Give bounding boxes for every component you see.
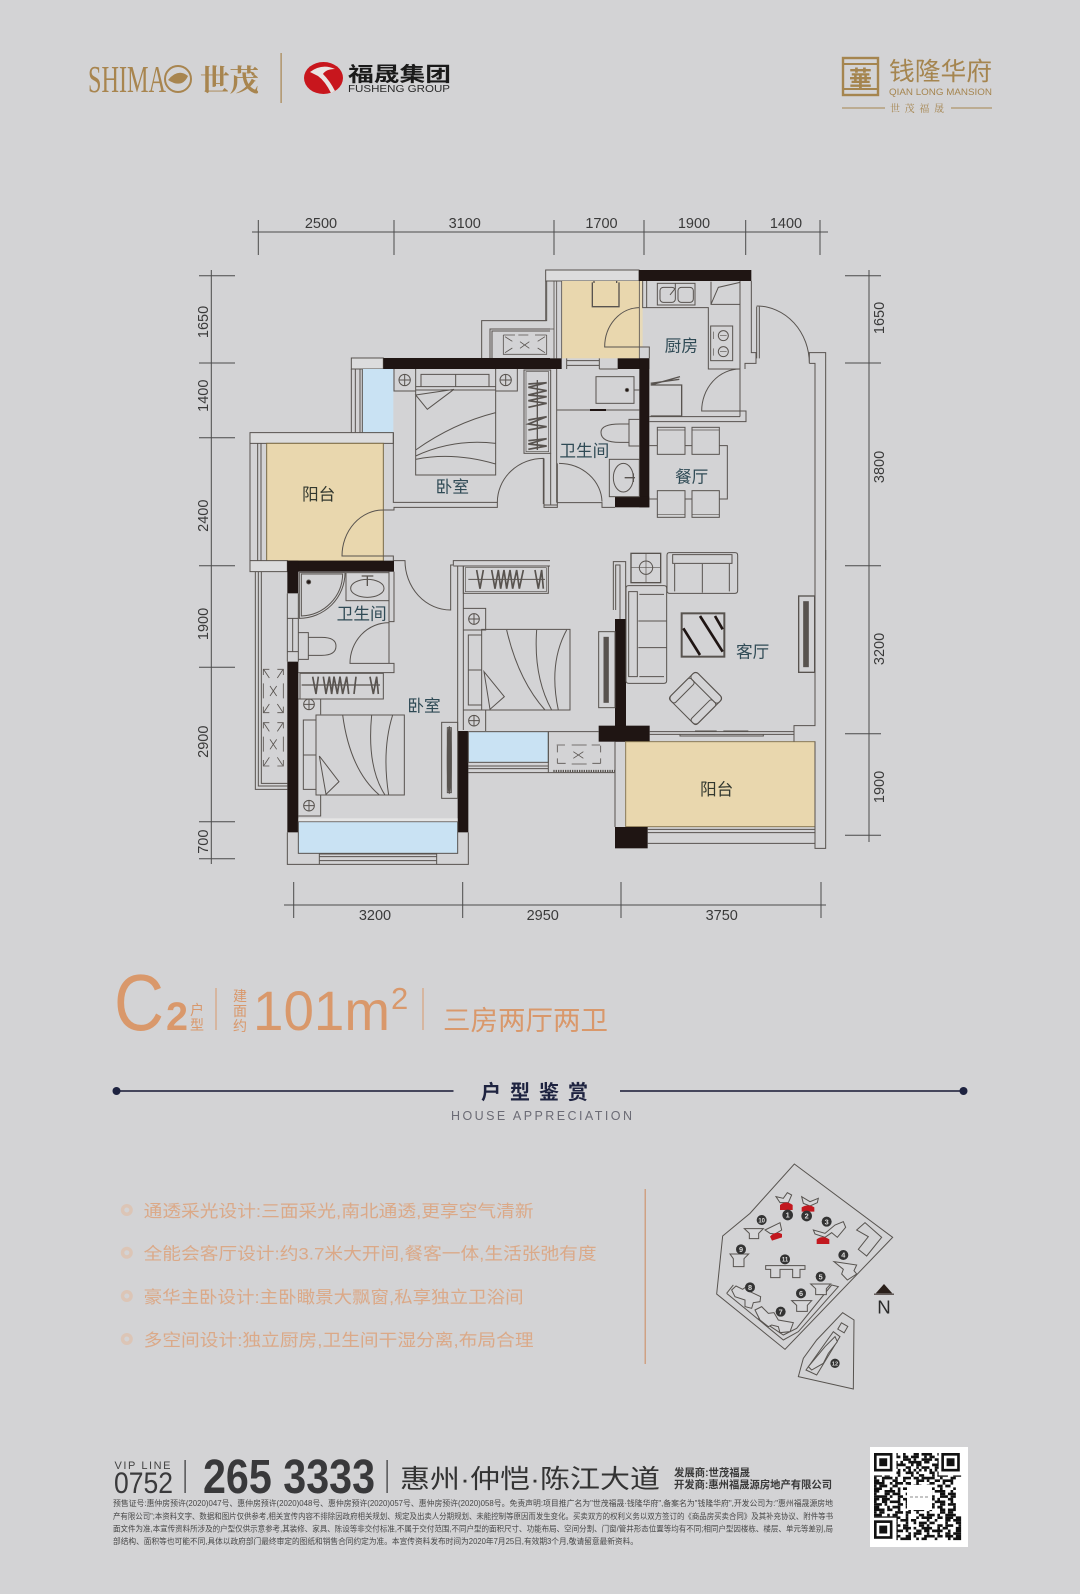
heading: unit type and area: 户 (190, 1002, 204, 1018)
icon: cooktop (711, 326, 733, 361)
site map building numbers: 9 (739, 1245, 743, 1254)
label: dining room: 餐厅 (675, 468, 708, 487)
floor plan: south-west rooms (250, 561, 570, 864)
dimension line: left: 700 (196, 830, 212, 854)
icon: air conditioner (557, 745, 601, 764)
label: living room: 客厅 (736, 643, 769, 662)
footer: contact: 发展商:世茂福晟 (674, 1466, 750, 1479)
floor plan: south-east rooms (520, 550, 826, 848)
logo: Shimao: 世茂 (200, 56, 259, 100)
icon: kitchen sink (643, 281, 740, 369)
logo: Qian Long Mansion: 世茂福晟 (890, 100, 944, 115)
logo: Fusheng Group: 福晟集团 (348, 63, 451, 86)
dimension line: bottom: 2950 (527, 908, 559, 924)
label: bathroom: 卫生间 (337, 604, 387, 623)
feature list (121, 1202, 597, 1350)
balcony fill (267, 443, 383, 561)
bay window (298, 822, 458, 853)
dimension line: left: 1650 (196, 306, 212, 338)
dimension line: right (845, 270, 888, 842)
icon: armchair (668, 671, 723, 726)
icon: wardrobe (524, 370, 551, 453)
section heading: house appreciation: 户型鉴赏 (481, 1080, 601, 1104)
site map highlighted units (770, 1202, 829, 1244)
heading: unit type and area: C (114, 958, 164, 1047)
icon: air conditioners (263, 669, 283, 766)
logo: Qian Long Mansion (842, 58, 992, 115)
icon: fridge (592, 281, 619, 307)
footer: contact (114, 1451, 832, 1504)
label: bathroom: 卫生间 (559, 442, 609, 461)
dimension line: right: 3800 (872, 451, 888, 483)
icon: sofa two seat (667, 553, 738, 593)
site map building numbers: 5 (819, 1272, 823, 1281)
site map building numbers (736, 1210, 848, 1368)
icon: bedside tables (298, 699, 321, 816)
dimension line: right: 1650 (872, 302, 888, 334)
icon: bedside tables (394, 369, 517, 391)
dimension line: bottom: 3750 (706, 908, 738, 924)
site map building numbers: 12 (832, 1361, 838, 1367)
dimension line: top (252, 216, 828, 255)
icon: bed (416, 369, 496, 475)
icon: TV (442, 722, 458, 798)
logo: Shimao (88, 56, 259, 101)
heading: unit type and area: 建 (233, 988, 247, 1004)
icon: toilet (298, 633, 336, 659)
icon: bedside tables (463, 608, 486, 731)
heading: unit type and area (114, 958, 608, 1047)
logo: Qian Long Mansion: 華 (849, 66, 872, 92)
site map building numbers: 4 (841, 1251, 846, 1260)
floor plan: north-west rooms (250, 270, 550, 562)
icon: coffee table (682, 613, 724, 657)
north arrow: N (877, 1296, 891, 1317)
footer: contact: 265 3333 (203, 1451, 375, 1504)
footer: contact: 0752 (114, 1467, 173, 1500)
icon: wardrobe (463, 566, 548, 593)
heading: unit type and area: 约 (233, 1018, 247, 1034)
feature 4: 多空间设计:独立厨房,卫生间干湿分离,布局合理 (144, 1331, 534, 1350)
floor plan: north-east rooms (520, 270, 826, 560)
footer: contact: VIP LINE (114, 1460, 170, 1472)
site map building numbers: 8 (748, 1283, 752, 1292)
footer: contact: 惠州·仲恺·陈江大道 (400, 1464, 660, 1494)
feature 2: 全能会客厅设计:约3.7米大开间,餐客一体,生活张弛有度 (144, 1245, 597, 1264)
icon: shaft (651, 377, 682, 416)
icon: basin (346, 573, 389, 601)
window (468, 732, 548, 762)
logo: Qian Long Mansion: 钱隆华府 (889, 58, 992, 86)
dimension line: left: 2400 (196, 500, 212, 532)
icon: sofa three seat (626, 586, 667, 683)
site map buildings (730, 1193, 857, 1370)
dimension line: top: 1700 (585, 216, 618, 232)
site map building numbers: 7 (779, 1307, 783, 1316)
site map (717, 1164, 894, 1389)
label: bedroom: 卧室 (436, 477, 469, 496)
dimension line: top: 1400 (770, 216, 802, 232)
icon: TV left (599, 632, 615, 708)
dimension line: bottom: 3200 (359, 908, 391, 924)
icon: dining set (649, 427, 727, 517)
logo: Fusheng Group (304, 62, 451, 95)
heading: unit type and area: 面 (233, 1003, 247, 1019)
footer: contact: 开发商:惠州福晟源房地产有限公司 (674, 1478, 832, 1491)
icon: shower (299, 573, 345, 618)
site map building numbers: 11 (782, 1258, 789, 1264)
label: kitchen: 厨房 (665, 337, 698, 356)
icon: bathtub (596, 377, 634, 403)
dimension line: left: 1400 (196, 380, 212, 412)
site map building numbers: 2 (805, 1212, 809, 1221)
logo: Qian Long Mansion: QIAN LONG MANSION (889, 87, 992, 98)
site map building numbers: 6 (799, 1289, 803, 1298)
dimension line: left: 1900 (196, 608, 212, 640)
footer: legal notice: 面文件为准,本宣传资料所涉及的户型仅供示意参考,其装修、家具、陈设等非交付标准,不属于交付范围,不同户型的面积尺寸、功能布局、空间分割、门窗/管井形态位置等均有不同;相同户型因楼栋、楼层、单元等差别,局 (113, 1524, 833, 1534)
label: balcony: 阳台 (302, 485, 335, 504)
footer: legal notice (113, 1498, 833, 1546)
dimension line: top: 1900 (678, 216, 710, 232)
floor plan (250, 270, 826, 864)
QR code (870, 1447, 968, 1547)
footer: legal notice: 预售证号:惠仲房预许(2020)047号、惠仲房预许(2020)048号、惠仲房预许(2020)057号、惠仲房预许(2020)058号。免责声明:项目推广名为"世茂福晟·钱隆华府",备案名为"钱隆华府",开发公司为:"惠州福晟源房地 (113, 1498, 833, 1508)
site map building numbers: 1 (786, 1211, 790, 1220)
heading: unit type and area: 2 (391, 981, 408, 1016)
icon: bed (468, 629, 570, 710)
icon: cupboard (711, 282, 740, 304)
section heading: house appreciation: HOUSE APPRECIATION (451, 1109, 632, 1123)
feature 3: 豪华主卧设计:主卧瞰景大飘窗,私享独立卫浴间 (144, 1287, 524, 1307)
label: bedroom: 卧室 (407, 697, 441, 716)
label: balcony: 阳台 (700, 780, 733, 799)
icon: basin (609, 459, 639, 497)
footer: legal notice: 产有限公司";本资料文字、数据和图片仅供参考,相关宣传内容不排除因政府相关规划、规定及出卖人分期规划、未能控制等原因而发生变化。买卖双方的权利义务以双方签订的《商品房买卖合同》及其补充协议、附件等书 (113, 1511, 833, 1521)
dimension line: right: 1900 (872, 771, 888, 803)
logo: Shimao: SHIMA (88, 59, 166, 101)
dimension line: left (196, 270, 235, 864)
icon: toilet (601, 419, 639, 446)
dimension line: bottom (284, 882, 826, 924)
north arrow (874, 1284, 894, 1317)
dimension line: top: 2500 (305, 216, 337, 232)
site map building numbers: 3 (825, 1217, 829, 1226)
footer: legal notice: 部结构、面积等也可能不同,具体以政府部门最终审定的图纸和销售合同约定为准。本宣传资料发布时间为2020年7月25日,有效期3个月,敬请留意最新资料。 (113, 1536, 638, 1546)
logo divider (280, 53, 282, 103)
icon: side table lamp (631, 553, 661, 583)
heading: unit type and area: 三房两厅两卫 (443, 1006, 608, 1036)
dimension line: right: 3200 (872, 633, 888, 665)
icon: wardrobe (300, 673, 383, 699)
icon: TV wall (799, 596, 815, 672)
heading: unit type and area: 型 (190, 1017, 204, 1033)
icon: bed (303, 715, 404, 795)
logo: Fusheng Group: FUSHENG GROUP (348, 84, 450, 95)
feature 1: 通透采光设计:三面采光,南北通透,更享空气清新 (144, 1202, 534, 1221)
heading: unit type and area: 2 (166, 995, 188, 1039)
dimension line: left: 2900 (196, 726, 212, 758)
heading: unit type and area: 101m (253, 979, 390, 1042)
site map building numbers: 10 (758, 1218, 766, 1224)
icon: air conditioner (503, 335, 547, 354)
dimension line: top: 3100 (449, 216, 481, 232)
section heading: house appreciation (112, 1080, 968, 1123)
